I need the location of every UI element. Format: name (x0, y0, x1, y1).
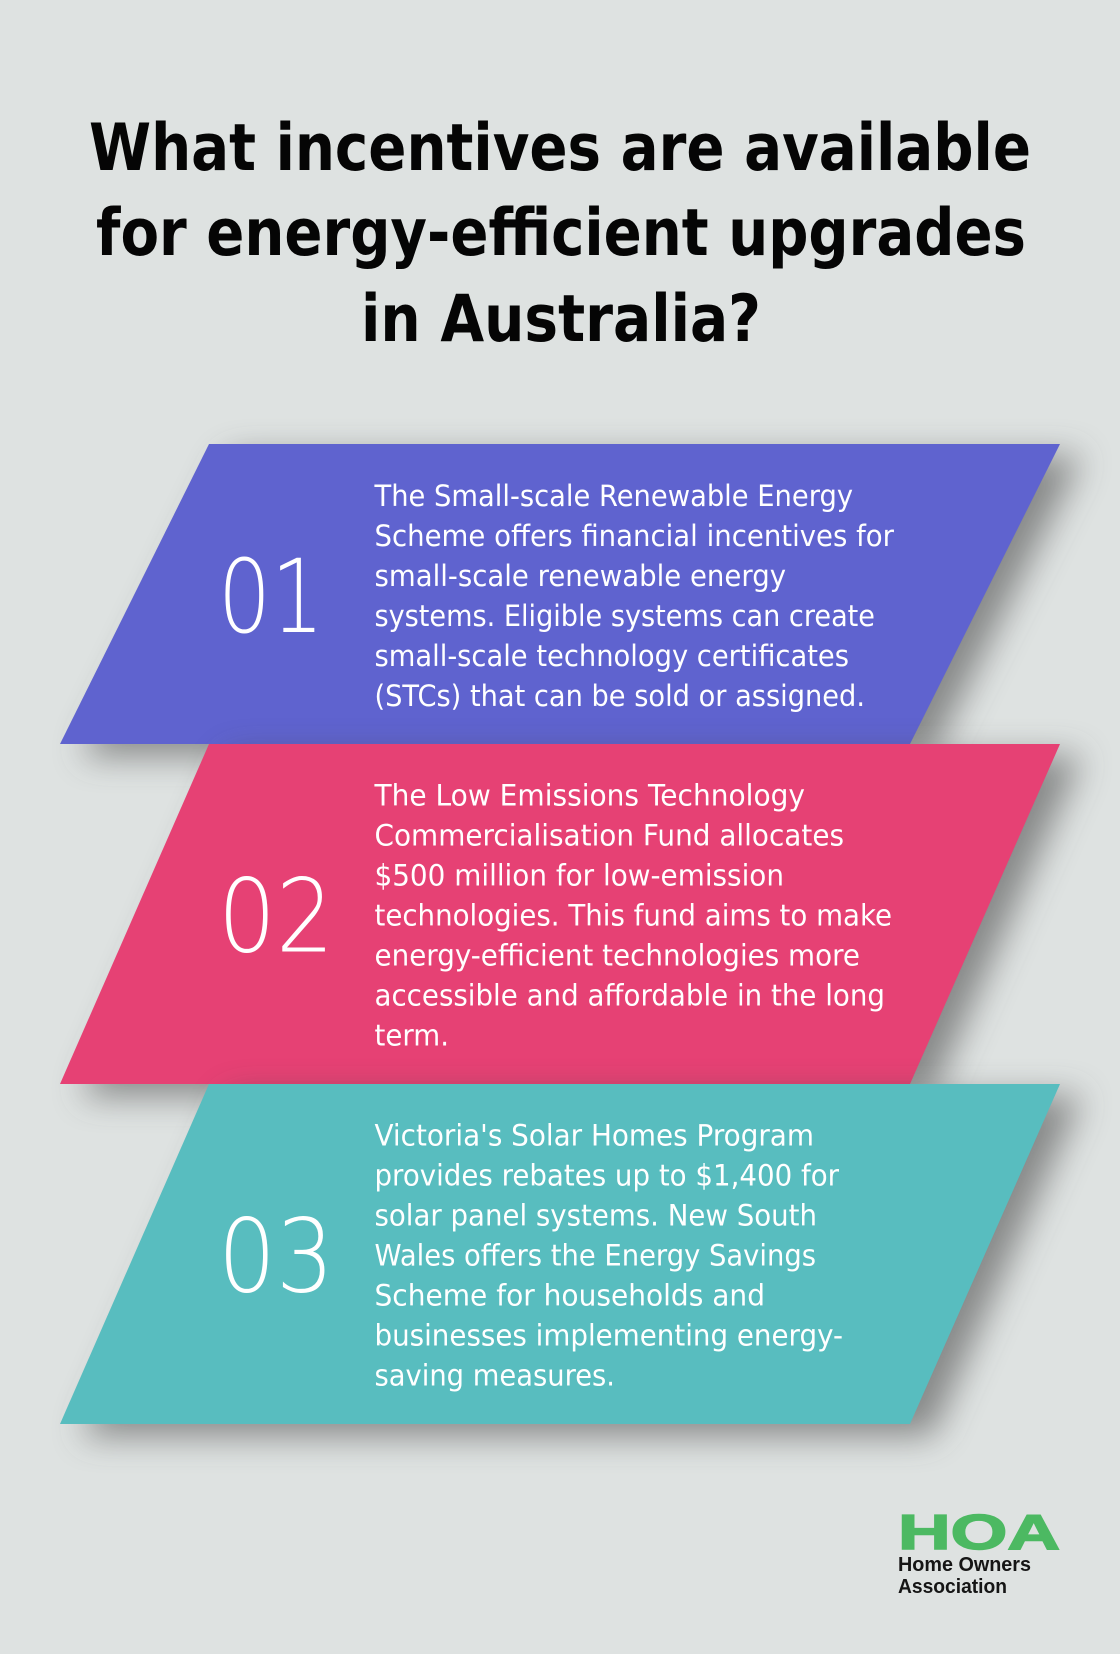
purple parallelogram (60, 444, 1060, 744)
description 02: Commercialisation Fund allocates (374, 818, 844, 852)
description 03 (374, 1118, 843, 1392)
description 03: provides rebates up to $1,400 for (374, 1158, 840, 1192)
description 03: Wales offers the Energy Savings (374, 1238, 816, 1272)
logo: HOA Home Owners Association (898, 1506, 1060, 1598)
description 02: term. (374, 1018, 449, 1052)
panel: step 01 small-scale renewable energy scheme (60, 444, 1082, 756)
panel: step 02 low emissions technology fund (60, 744, 1082, 1096)
panel: step 03 state solar programs (60, 1084, 1082, 1436)
number 03: 03 (218, 1198, 334, 1316)
description 01 (374, 479, 895, 713)
description 01: Scheme offers financial incentives for (374, 519, 895, 553)
description 03: solar panel systems. New South (374, 1198, 817, 1232)
description 01: small-scale renewable energy (374, 559, 786, 593)
description 02: technologies. This fund aims to make (374, 898, 892, 932)
logo wordmark line 1: Home Owners (898, 1554, 1031, 1576)
description 01: The Small-scale Renewable Energy (374, 479, 853, 513)
description 02: accessible and affordable in the long (374, 978, 885, 1012)
description 02: $500 million for low-emission (374, 858, 784, 892)
description 01: systems. Eligible systems can create (374, 599, 875, 633)
logo wordmark line 2: Association (898, 1576, 1007, 1598)
description 02 (374, 778, 892, 1052)
title (89, 111, 1031, 357)
teal parallelogram (60, 1084, 1060, 1424)
description 03: saving measures. (374, 1358, 615, 1392)
pink parallelogram (60, 744, 1060, 1084)
number 01: 01 (218, 538, 324, 657)
description 02: The Low Emissions Technology (374, 778, 805, 812)
title: in Australia? (361, 282, 761, 357)
description 01: small-scale technology certificates (374, 639, 849, 673)
description 03: Victoria's Solar Homes Program (374, 1118, 814, 1152)
description 03: businesses implementing energy- (374, 1318, 843, 1352)
description 03: Scheme for households and (374, 1278, 765, 1312)
logo mark HOA: HOA (898, 1506, 1060, 1560)
description 01: (STCs) that can be sold or assigned. (374, 679, 865, 713)
number 02: 02 (218, 858, 334, 976)
description 02: energy-efficient technologies more (374, 938, 860, 972)
